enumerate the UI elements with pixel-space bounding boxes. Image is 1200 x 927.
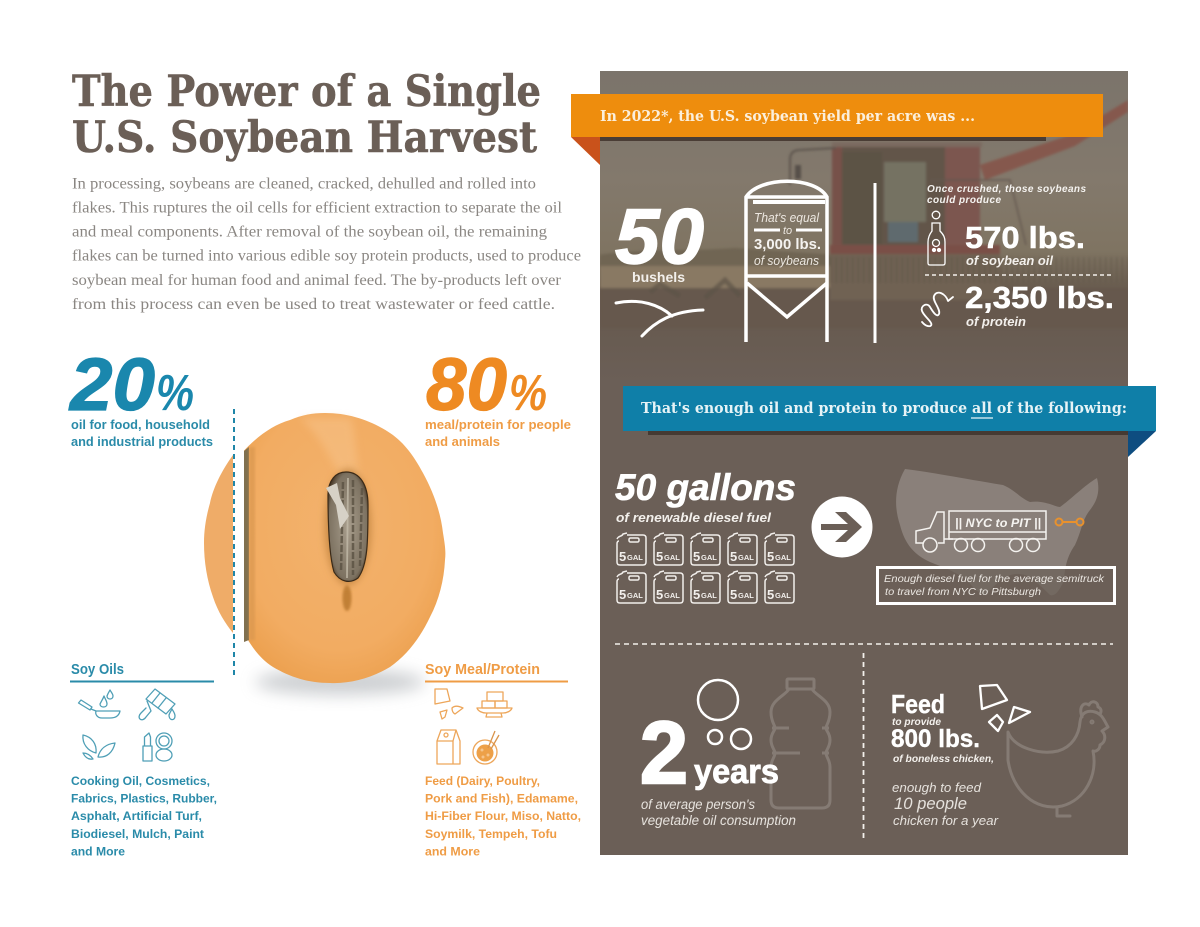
intro paragraph: and meal components. After removal of the soybean oil, the remaining <box>72 224 547 240</box>
stat: 50 gallons: of renewable diesel fuel <box>616 510 771 525</box>
icon group: ten 5-gallon fuel cans: GAL <box>738 591 754 600</box>
stat: 2 years: 2 <box>640 703 688 802</box>
stat: 80 percent meal: 80 <box>426 343 507 426</box>
intro paragraph: from this process can even be used to treat wastewater or feed cattle. <box>72 296 555 313</box>
heading: soy oils: Soy Oils <box>71 662 124 678</box>
callout: diesel fuel distance: Enough diesel fuel for the average semitruck <box>884 573 1105 585</box>
icon group: ten 5-gallon fuel cans: 5 <box>619 549 626 564</box>
stat: 50 bushels: 50 <box>615 192 704 280</box>
stat: 570 lbs of soybean oil: of soybean oil <box>966 254 1054 268</box>
icon: lipstick and compact <box>143 733 172 761</box>
divider: harvest vertical line <box>874 183 876 343</box>
list: soy meal uses: Hi-Fiber Flour, Miso, Natto, <box>425 809 581 823</box>
icon group: ten 5-gallon fuel cans: GAL <box>775 553 791 562</box>
icon: grain silo with text: of soybeans <box>754 254 819 268</box>
icon: soymilk carton <box>437 730 460 764</box>
hilum <box>325 469 371 611</box>
icon group: ten 5-gallon fuel cans: 5 <box>619 587 626 602</box>
list: soy meal uses <box>425 774 581 858</box>
banner: enough oil and protein: That's enough oil and protein to produce all of the following: <box>641 399 1127 417</box>
intro paragraph <box>72 176 581 313</box>
icon: feed flakes <box>435 689 463 719</box>
heading: soy meal protein: Soy Meal/Protein <box>425 662 540 678</box>
stat: 80 percent meal <box>425 343 571 449</box>
text: once crushed: Once crushed, those soybeans <box>927 184 1086 195</box>
stat: 80 percent meal: meal/protein for people <box>425 417 571 432</box>
stat: 20 percent oil: oil for food, household <box>71 417 210 432</box>
list: soy oil uses: Asphalt, Artificial Turf, <box>71 809 202 823</box>
icon group: ten 5-gallon fuel cans: 5 <box>730 587 737 602</box>
stat: feed 800 lbs of chicken: of boneless chicken, <box>893 754 994 765</box>
text: once crushed <box>927 184 1086 206</box>
photo: combine harvester in field <box>600 71 1128 330</box>
panel: brown background <box>600 71 1128 855</box>
icon: paintbrush with drops <box>139 689 175 720</box>
stat: 2 years <box>640 703 796 828</box>
icon: arrow in circle <box>812 496 872 558</box>
icon: leaves <box>83 735 115 759</box>
intro paragraph: flakes. This ruptures the oil cells for efficient extraction to separate the oil <box>72 200 562 216</box>
title: The Power of a Single <box>72 67 541 117</box>
icon group: ten 5-gallon fuel cans: GAL <box>701 591 717 600</box>
stat: feed 800 lbs of chicken <box>891 689 999 828</box>
icon: route marker NYC to Pittsburgh <box>1056 518 1084 526</box>
banner: 2022 soybean yield <box>571 94 1103 165</box>
icon: semitruck NYC to PIT: || NYC to PIT || <box>955 516 1041 530</box>
stat: 80 percent meal: % <box>509 364 547 421</box>
stat: feed 800 lbs of chicken: Feed <box>891 689 945 719</box>
callout: diesel fuel distance <box>878 568 1114 604</box>
stat: 20 percent oil <box>68 343 213 449</box>
icon group: ten 5-gallon fuel cans: 5 <box>656 549 663 564</box>
icon: semitruck NYC to PIT <box>916 511 1046 552</box>
icon group: ten 5-gallon fuel cans: 5 <box>767 549 774 564</box>
stat: 2 years: years <box>694 753 779 791</box>
list: soy meal uses: Pork and Fish), Edamame, <box>425 792 578 806</box>
icon: natto bowl with chopsticks <box>473 731 499 764</box>
icon group: ten 5-gallon fuel cans: 5 <box>767 587 774 602</box>
dashed divider between oil and meal <box>233 409 235 678</box>
icon: oil bottle <box>928 211 945 265</box>
list: soy oil uses: Fabrics, Plastics, Rubber, <box>71 792 217 806</box>
stat: feed 800 lbs of chicken: 10 people <box>894 794 967 813</box>
icon group: ten 5-gallon fuel cans: 5 <box>693 549 700 564</box>
icon group: ten 5-gallon fuel cans: 5 <box>730 549 737 564</box>
stat: 2 years: vegetable oil consumption <box>641 813 796 828</box>
list: soy meal uses: Soymilk, Tempeh, Tofu <box>425 827 557 841</box>
icon: oil bottle outline <box>771 679 830 808</box>
text: once crushed: could produce <box>927 195 1001 206</box>
icon group: ten 5-gallon fuel cans: GAL <box>664 553 680 562</box>
stat: 20 percent oil: and industrial products <box>71 434 213 449</box>
icon: grain silo with text: That's equal <box>754 211 820 225</box>
intro paragraph: flakes can be turned into various edible soy protein products, used to produce <box>72 248 581 264</box>
icon group: ten 5-gallon fuel cans: 5 <box>656 587 663 602</box>
stat: 2,350 lbs of protein <box>965 280 1114 329</box>
list: soy meal uses: and More <box>425 844 480 858</box>
stat: feed 800 lbs of chicken: 800 lbs. <box>891 725 980 753</box>
icon: grain silo with text: 3,000 lbs. <box>754 237 821 253</box>
stat: 570 lbs of soybean oil <box>965 220 1085 268</box>
stat: feed 800 lbs of chicken: to provide <box>892 717 941 728</box>
banner: 2022 soybean yield: In 2022*, the U.S. soybean yield per acre was ... <box>600 108 975 125</box>
icon group: ten 5-gallon fuel cans: GAL <box>775 591 791 600</box>
map: United States silhouette <box>896 469 1098 595</box>
icon: grain silo with text <box>746 181 827 342</box>
icon: frying pan with oil drops <box>78 690 120 718</box>
icon: grain silo with text: to <box>783 225 792 237</box>
panel: soy meal and protein <box>425 662 581 858</box>
icon group: ten 5-gallon fuel cans: GAL <box>627 553 643 562</box>
list: soy oil uses: and More <box>71 844 125 858</box>
stat: feed 800 lbs of chicken: chicken for a year <box>893 813 999 828</box>
icon: tofu on plate <box>477 692 512 717</box>
icon: protein chain <box>922 293 953 326</box>
stat: 50 bushels: bushels <box>632 270 685 285</box>
stat: 20 percent oil: 20 <box>68 343 155 426</box>
list: soy oil uses: Biodiesel, Mulch, Paint <box>71 827 204 841</box>
title: U.S. Soybean Harvest <box>72 113 537 163</box>
icon group: ten 5-gallon fuel cans: GAL <box>664 591 680 600</box>
list: soy oil uses <box>71 774 217 858</box>
icon group: ten 5-gallon fuel cans: GAL <box>738 553 754 562</box>
stat: 2,350 lbs of protein: 2,350 lbs. <box>965 280 1114 315</box>
stat: 50 gallons: 50 gallons <box>615 467 796 508</box>
panel: soy oils <box>70 662 217 858</box>
stat: 20 percent oil: % <box>156 364 194 421</box>
soybean illustration <box>204 413 445 695</box>
list: soy oil uses: Cooking Oil, Cosmetics, <box>71 774 210 788</box>
icon: soybean sprout swoosh <box>616 301 703 336</box>
stat: 50 bushels <box>615 192 704 336</box>
icon group: ten 5-gallon fuel cans: GAL <box>627 591 643 600</box>
callout: diesel fuel distance: to travel from NYC to Pittsburgh <box>885 586 1041 598</box>
stat: feed 800 lbs of chicken: enough to feed <box>892 781 982 795</box>
intro paragraph: In processing, soybeans are cleaned, cracked, dehulled and rolled into <box>72 176 536 192</box>
icon: chicken outline <box>1008 702 1108 816</box>
title <box>72 67 541 163</box>
stat: 80 percent meal: and animals <box>425 434 500 449</box>
intro paragraph: soybean meal for human food and animal feed. The by-products left over <box>72 272 562 289</box>
stat: 570 lbs of soybean oil: 570 lbs. <box>965 220 1085 255</box>
icon group: ten 5-gallon fuel cans: 5 <box>693 587 700 602</box>
stat: 2,350 lbs of protein: of protein <box>966 315 1026 329</box>
banner: enough oil and protein <box>623 386 1156 457</box>
icon group: ten 5-gallon fuel cans: GAL <box>701 553 717 562</box>
icon: feed flakes <box>980 685 1030 731</box>
list: soy meal uses: Feed (Dairy, Poultry, <box>425 774 540 788</box>
icon group: ten 5-gallon fuel cans <box>617 533 794 603</box>
icon: oil bubbles <box>698 680 751 749</box>
stat: 2 years: of average person's <box>641 797 755 812</box>
